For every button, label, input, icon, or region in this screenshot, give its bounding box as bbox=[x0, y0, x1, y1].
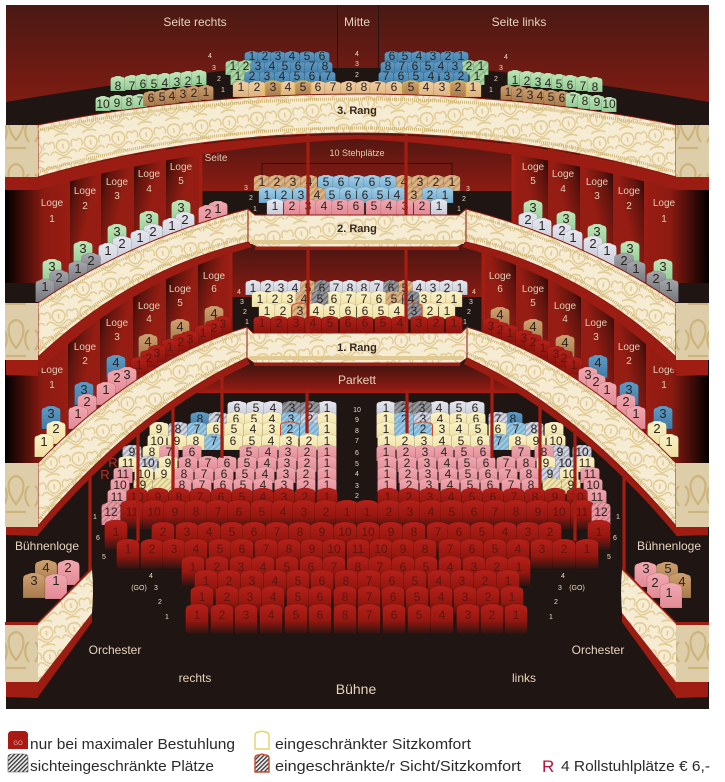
Parkett row 2: 11 bbox=[111, 490, 124, 504]
Loge upper labels: 2 bbox=[626, 201, 632, 212]
lower loge seats right: 321321321 bbox=[488, 319, 578, 372]
Parkett row 4: 11 bbox=[584, 467, 597, 481]
Orchestra row 6: 10 bbox=[338, 525, 352, 539]
Parkett row 9: 8765432112345678 bbox=[197, 412, 517, 426]
labels Parkett and stage: Orchester bbox=[572, 643, 624, 657]
balustrade: 1. Rang: 1. Rang bbox=[337, 342, 377, 354]
Orchestra row 6: 10 bbox=[361, 525, 375, 539]
Parkett row 5: 10 bbox=[558, 456, 572, 470]
Loge lower labels: Loge bbox=[618, 342, 641, 353]
row labels Parkett sides and Orchester bbox=[93, 514, 620, 621]
labels Parkett and stage bbox=[15, 373, 701, 697]
section headings: Seite rechts bbox=[163, 15, 227, 29]
Parkett row 2: 10 bbox=[570, 490, 584, 504]
Rang 1 row labels: 4321 bbox=[463, 289, 476, 326]
Loge lower labels: Loge bbox=[489, 271, 512, 282]
1. Rang seats row 2: 123456654321 bbox=[264, 304, 451, 318]
Loge lower labels: 2 bbox=[82, 356, 88, 367]
upper loge seats left: 11111 bbox=[41, 218, 176, 294]
Parkett row 6: 987654321123456789 bbox=[129, 445, 564, 459]
Loge lower labels: Loge bbox=[138, 301, 161, 312]
Loge lower labels: Loge bbox=[585, 318, 608, 329]
panel: 2. Rang dark floor bbox=[202, 191, 512, 227]
Mitte divider lines bbox=[338, 5, 378, 70]
3. Rang centre seats row 4: 123456654321 bbox=[249, 49, 465, 63]
Loge lower labels: 3 bbox=[114, 332, 120, 343]
Loge upper labels: 2 bbox=[82, 201, 88, 212]
row labels Parkett sides and Orchester: 4321 bbox=[549, 573, 565, 621]
Bühnenloge seats left bbox=[23, 560, 80, 599]
Parkett row 1: 12 bbox=[104, 505, 118, 519]
panel: dark band behind 3. Rang seats bbox=[6, 68, 709, 135]
section headings bbox=[163, 15, 546, 164]
row labels Parkett sides and Orchester: 4321 bbox=[149, 573, 169, 621]
Loge upper labels: Loge bbox=[106, 177, 129, 188]
Loge lower labels: 1 bbox=[661, 380, 667, 391]
labels Parkett and stage: Orchester bbox=[89, 643, 141, 657]
Orchestra row 2 bbox=[190, 586, 524, 616]
Loge lower labels: 6 bbox=[497, 284, 503, 295]
Rang 1 row labels: 4321 bbox=[237, 289, 249, 326]
lower loge seats right: 4444 bbox=[496, 307, 602, 370]
panels: upper loges right bbox=[512, 130, 709, 330]
section headings: Seite bbox=[205, 153, 228, 164]
1. Rang seats row 4: 1234567887654321 bbox=[250, 281, 464, 295]
Bühnenloge seats left: 4231 bbox=[30, 560, 72, 588]
3. Rang seats Seite rechts: 987654321 bbox=[114, 85, 210, 110]
Loge upper labels: 1 bbox=[661, 214, 667, 225]
section headings: 10 Stehplätze bbox=[329, 148, 385, 158]
Stehplätze bracket bbox=[262, 164, 452, 178]
Parkett row 3: 987654321123456789 bbox=[140, 478, 575, 492]
Loge upper labels: Loge bbox=[522, 162, 545, 173]
Loge lower labels: Loge bbox=[522, 284, 545, 295]
Orchestra row 2: 12345687654321 bbox=[199, 590, 516, 604]
Loge lower labels: 2 bbox=[626, 356, 632, 367]
panels: lower loges left bbox=[5, 230, 232, 495]
Loge upper labels: 5 bbox=[178, 176, 184, 187]
Parkett row 4: 10 bbox=[562, 467, 576, 481]
Parkett row 4: 11 bbox=[117, 467, 130, 481]
Parkett row 4: 987654321123456789 bbox=[161, 467, 554, 481]
Parkett row 1: 987654321123456789 bbox=[172, 505, 542, 519]
upper loge seats right bbox=[518, 200, 678, 302]
Loge lower labels: Loge bbox=[554, 301, 577, 312]
Parkett pillars bbox=[90, 375, 624, 572]
row numbers 3. Rang: 4321 bbox=[208, 53, 225, 94]
balustrades: Bühnenloge bbox=[5, 567, 709, 698]
legend icon: maximale Bestuhlung: GO bbox=[13, 741, 23, 747]
Orchestra row 6 bbox=[104, 520, 610, 552]
3. Rang centre seats row 2: 12345677654321 bbox=[235, 69, 481, 83]
Loge lower labels: 5 bbox=[177, 298, 183, 309]
Parkett row 5: 11 bbox=[579, 456, 592, 470]
Loge upper labels: 4 bbox=[146, 184, 152, 195]
Rang 2 centre row labels: 321 bbox=[244, 185, 257, 213]
Loge upper labels: Loge bbox=[138, 169, 161, 180]
3. Rang seats Seite rechts: 87654321 bbox=[115, 73, 203, 93]
panel: 2. Rang centre wall bbox=[202, 130, 512, 191]
Orchestra row 1 bbox=[186, 604, 528, 634]
Loge lower labels: Loge bbox=[203, 271, 226, 282]
1. Rang seats row 1 red: 123456654321 bbox=[259, 316, 458, 330]
Parkett row 5: 10 bbox=[141, 456, 155, 470]
labels Parkett and stage: Bühnenloge bbox=[15, 539, 79, 553]
Parkett row labels: 10 bbox=[353, 407, 361, 414]
Parkett row 2 bbox=[108, 488, 606, 511]
3. Rang centre seats row 1: 1234567887654321 bbox=[238, 80, 477, 94]
Parkett row 2: 10 bbox=[130, 490, 144, 504]
Loge upper labels bbox=[41, 162, 676, 225]
Parkett row 1: 11 bbox=[126, 505, 139, 519]
Loge upper labels: 4 bbox=[560, 184, 566, 195]
upper centre pillars bbox=[308, 133, 406, 333]
balustrade: 3. Rang: 3. Rang bbox=[337, 105, 377, 117]
balustrade: 2. Rang: 2. Rang bbox=[337, 223, 377, 235]
Loge lower labels: 1 bbox=[49, 380, 55, 391]
Parkett row labels: 98765432 bbox=[355, 417, 359, 500]
Rang 2 centre row labels: 321 bbox=[457, 186, 470, 213]
2. Rang seats row 1: 12345654321 bbox=[272, 199, 443, 213]
Orchestra row 3 bbox=[194, 570, 520, 600]
balustrade: 2. Rang bbox=[5, 209, 709, 376]
lower loge seats left: 4444 bbox=[112, 306, 218, 370]
Orchestra row 6: 123456789987654321 bbox=[113, 525, 603, 539]
Parkett row 1: 11 bbox=[576, 505, 589, 519]
row numbers 3. Rang: 432 bbox=[355, 51, 359, 79]
row numbers 3. Rang: 4321 bbox=[489, 54, 508, 94]
Loge lower labels: Loge bbox=[653, 365, 676, 376]
Orchestra row 5: 123456789987654321 bbox=[125, 542, 591, 556]
panel: 1. Rang centre wall bbox=[232, 245, 482, 300]
Loge lower labels bbox=[41, 271, 676, 391]
3. Rang seats Seite links: 12345678 bbox=[512, 73, 599, 94]
Parkett row 7: 987654321123456789 bbox=[174, 434, 540, 448]
Loge lower labels: Loge bbox=[74, 342, 97, 353]
balustrade: 1. Rang bbox=[5, 327, 709, 536]
3. Rang seats Seite links bbox=[500, 70, 616, 112]
Orchestra row 5 bbox=[116, 539, 598, 569]
2. Rang seats row 3: 1234567654321 bbox=[259, 175, 456, 189]
Orchestra row 4: 123456787654321 bbox=[190, 560, 523, 574]
Orchestra row 5: 10 bbox=[327, 542, 341, 556]
section headings: Seite links bbox=[492, 15, 546, 29]
3. Rang seats Seite links: 10 bbox=[602, 97, 616, 111]
lower loge seats left: 321321321 bbox=[40, 367, 131, 449]
wheelchair markers R: R bbox=[108, 455, 118, 470]
Parkett row 7: 10 bbox=[549, 434, 563, 448]
Bühnenloge seats right bbox=[634, 561, 691, 608]
Loge upper labels: 1 bbox=[49, 214, 55, 225]
Orchestra row 5: 11 bbox=[352, 542, 365, 556]
wheelchair markers R bbox=[100, 455, 118, 482]
row numbers 3. Rang bbox=[208, 51, 508, 94]
Parkett row 1: 10 bbox=[552, 505, 566, 519]
row labels Parkett sides and Orchester: 165 bbox=[93, 514, 106, 561]
Bühnenloge seats right: 35241 bbox=[642, 561, 686, 600]
Parkett row 3: 10 bbox=[586, 478, 600, 492]
Parkett row 1 bbox=[102, 500, 610, 530]
Parkett row 5: 11 bbox=[122, 456, 135, 470]
Seite seats bbox=[198, 201, 228, 228]
Seite seats: 21 bbox=[204, 201, 222, 221]
labels Parkett and stage: rechts bbox=[179, 671, 211, 685]
Loge upper labels: Loge bbox=[170, 162, 193, 173]
upper loge seats left: 22222 bbox=[55, 212, 189, 285]
lower loge seats left: 321321321 bbox=[136, 317, 227, 372]
row labels Parkett sides and Orchester: (GO) bbox=[569, 585, 585, 592]
Loge lower labels: Loge bbox=[106, 318, 129, 329]
panel: 1. Rang dark floor bbox=[232, 297, 482, 337]
legend text 2: sichteingeschränkte Plätze bbox=[30, 758, 214, 775]
Rang 2 centre row labels bbox=[244, 185, 470, 213]
labels Parkett and stage: Bühnenloge bbox=[637, 539, 701, 553]
Loge lower labels: 3 bbox=[593, 332, 599, 343]
legend icon: maximale Bestuhlung bbox=[8, 731, 28, 749]
Parkett row 6: 10 bbox=[575, 445, 589, 459]
Orchestra row 3: 12345687654321 bbox=[203, 574, 512, 588]
upper loge seats right: 11111 bbox=[538, 218, 673, 294]
Parkett row 2: 987654321123456789 bbox=[155, 490, 559, 504]
panel: upper red wall bbox=[6, 5, 709, 135]
2. Rang seats row 2: 123456654321 bbox=[264, 188, 449, 202]
lower loge seats right bbox=[482, 307, 678, 457]
panels: lower loges right bbox=[482, 230, 709, 495]
Parkett row 1: 10 bbox=[147, 505, 161, 519]
Loge upper labels: 3 bbox=[594, 191, 600, 202]
legend text 4: eingeschränkte/r Sicht/Sitzkomfort bbox=[275, 758, 522, 775]
Orchestra row 5: 10 bbox=[374, 542, 388, 556]
upper loge seats right: 22222 bbox=[524, 212, 660, 286]
Rang 1 row labels bbox=[237, 289, 476, 326]
Parkett row 7: 10 bbox=[150, 434, 164, 448]
Loge upper labels: 5 bbox=[530, 176, 536, 187]
Loge lower labels: Loge bbox=[169, 284, 192, 295]
labels Parkett and stage: Parkett bbox=[338, 373, 377, 387]
row labels Parkett sides and Orchester: 165 bbox=[607, 514, 620, 561]
3. Rang seats Seite rechts bbox=[96, 70, 214, 111]
Parkett row 5: 987654321123456789 bbox=[165, 456, 550, 470]
upper loge seats left: 33333 bbox=[48, 200, 185, 274]
panels: upper loges left bbox=[5, 130, 202, 330]
Parkett row labels bbox=[353, 407, 361, 500]
Loge upper labels: Loge bbox=[552, 169, 575, 180]
Parkett row 3: 10 bbox=[113, 478, 127, 492]
legend text 3: eingeschränkter Sitzkomfort bbox=[275, 736, 472, 753]
upper loge seats right: 33333 bbox=[529, 200, 667, 274]
Orchestra row 1: 12345687654321 bbox=[194, 608, 520, 622]
Parkett row 4: 10 bbox=[137, 467, 151, 481]
legend icon: sichteingeschränkt bbox=[8, 754, 28, 772]
Orchestra row 4 bbox=[182, 556, 530, 586]
Parkett row 8: 987654321123456789 bbox=[156, 422, 558, 436]
3. Rang seats Seite links: 123456789 bbox=[505, 85, 601, 109]
Loge lower labels: Loge bbox=[41, 365, 64, 376]
Parkett row 1: 12 bbox=[594, 505, 608, 519]
Loge upper labels: Loge bbox=[653, 198, 676, 209]
Loge upper labels: Loge bbox=[74, 186, 97, 197]
Loge lower labels: 4 bbox=[146, 314, 152, 325]
labels Parkett and stage: Bühne bbox=[336, 681, 376, 697]
row labels Parkett sides and Orchester: (GO) bbox=[131, 585, 147, 592]
balustrade: 3. Rang bbox=[5, 94, 709, 190]
Loge lower labels: 4 bbox=[562, 314, 568, 325]
Loge lower labels: 6 bbox=[211, 284, 217, 295]
labels Parkett and stage: links bbox=[512, 671, 536, 685]
1. Rang seats row 3: 12345677654321 bbox=[257, 292, 458, 306]
legend icon: eingeschränkter Sitzkomfort bbox=[255, 731, 269, 749]
legend icon: eingeschränkte Sicht und Sitzkomfort bbox=[255, 754, 269, 772]
section headings: Mitte bbox=[344, 15, 370, 29]
panel: Parkett header bbox=[179, 363, 535, 393]
Loge upper labels: Loge bbox=[586, 177, 609, 188]
legend bbox=[8, 731, 710, 776]
wheelchair markers R: R bbox=[100, 467, 110, 482]
legend text 1: nur bei maximaler Bestuhlung bbox=[30, 736, 235, 753]
Loge lower labels: 5 bbox=[530, 298, 536, 309]
Parkett row 2: 11 bbox=[591, 490, 604, 504]
3. Rang centre seats row 3: 1234567887654321 bbox=[230, 59, 485, 73]
upper loge seats left bbox=[36, 200, 194, 302]
3. Rang seats Seite rechts: 10 bbox=[96, 97, 110, 111]
lower loge seats left bbox=[34, 306, 232, 457]
Loge upper labels: Loge bbox=[618, 186, 641, 197]
Loge upper labels: Loge bbox=[41, 198, 64, 209]
legend text 5: 4 Rollstuhlplätze € 6,- bbox=[561, 758, 710, 775]
lower loge seats right: 321321321 bbox=[584, 367, 673, 449]
Loge upper labels: 3 bbox=[114, 191, 120, 202]
Parkett row 10: 654321123456 bbox=[234, 401, 479, 415]
legend marker R: R bbox=[542, 757, 554, 776]
